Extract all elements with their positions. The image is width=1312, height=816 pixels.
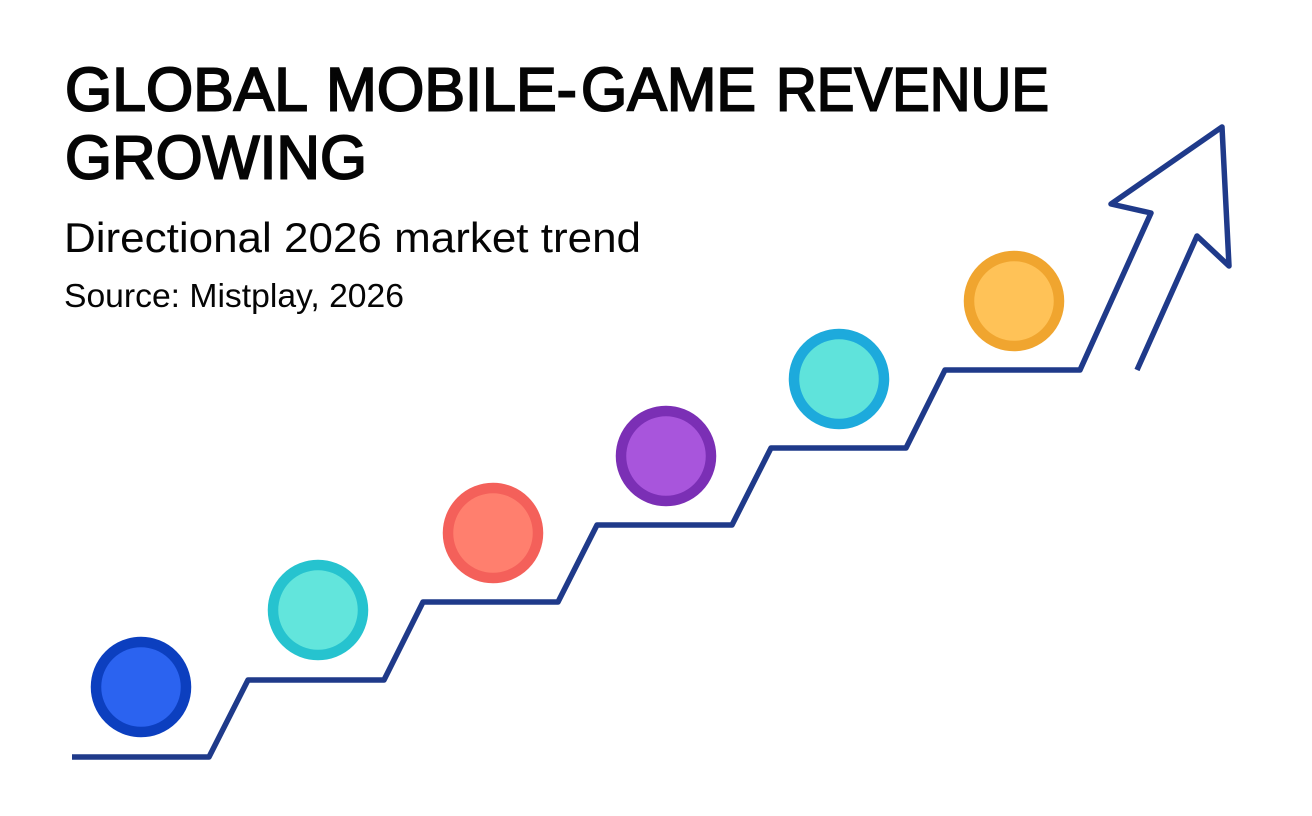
source: Source: Mistplay, 2026 xyxy=(64,277,404,314)
circle 3: coral xyxy=(448,488,538,578)
title: GLOBAL xyxy=(65,56,308,124)
circle 5: cyan xyxy=(794,334,884,424)
circle 2: teal xyxy=(273,565,363,655)
circle 4: purple xyxy=(621,411,711,501)
title: MOBILE- xyxy=(326,56,577,124)
title: GAME xyxy=(581,56,756,124)
title: GROWING xyxy=(65,124,367,192)
subtitle: Directional 2026 market trend xyxy=(64,214,641,261)
title: REVENUE xyxy=(776,56,1049,124)
circle 6: orange xyxy=(969,256,1059,346)
staircase arrow xyxy=(72,127,1229,757)
circle 1: blue xyxy=(96,642,186,732)
title xyxy=(65,56,1049,192)
